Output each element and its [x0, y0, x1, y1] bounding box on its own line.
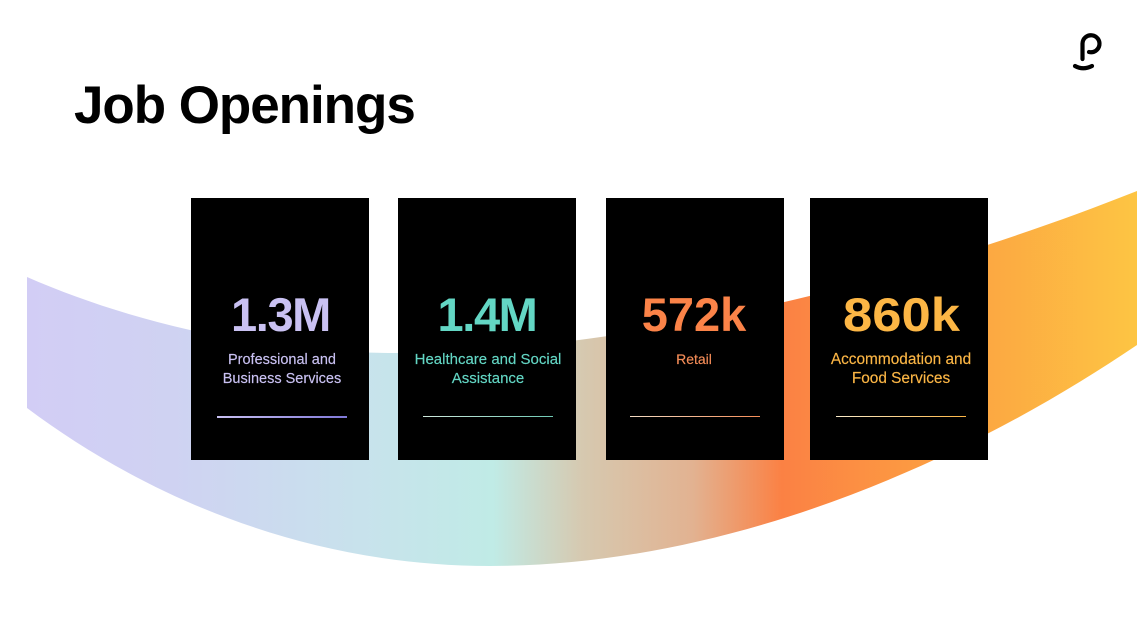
number: 572k — [642, 288, 746, 341]
label: Business Services — [223, 371, 341, 387]
label — [415, 351, 561, 387]
card: professional and business services — [191, 198, 369, 460]
label: Retail — [676, 351, 712, 367]
icon: logo — [1072, 33, 1102, 70]
card: retail — [606, 198, 784, 460]
label: Assistance — [452, 370, 524, 387]
label: Accommodation and — [831, 351, 971, 368]
label — [223, 352, 341, 387]
rule — [836, 416, 966, 417]
card: accommodation and food services — [810, 198, 988, 460]
label: Healthcare and Social — [415, 351, 561, 368]
number: 860k — [843, 288, 960, 341]
number: 1.4M — [438, 288, 536, 341]
label: Food Services — [852, 370, 950, 387]
card: healthcare and social assistance — [398, 198, 576, 460]
label: Professional and — [228, 352, 336, 368]
label — [830, 351, 971, 387]
title: Job Openings — [74, 76, 415, 135]
rule — [630, 416, 760, 417]
number: 1.3M — [231, 288, 330, 341]
rule — [423, 416, 553, 417]
rule — [217, 416, 347, 418]
